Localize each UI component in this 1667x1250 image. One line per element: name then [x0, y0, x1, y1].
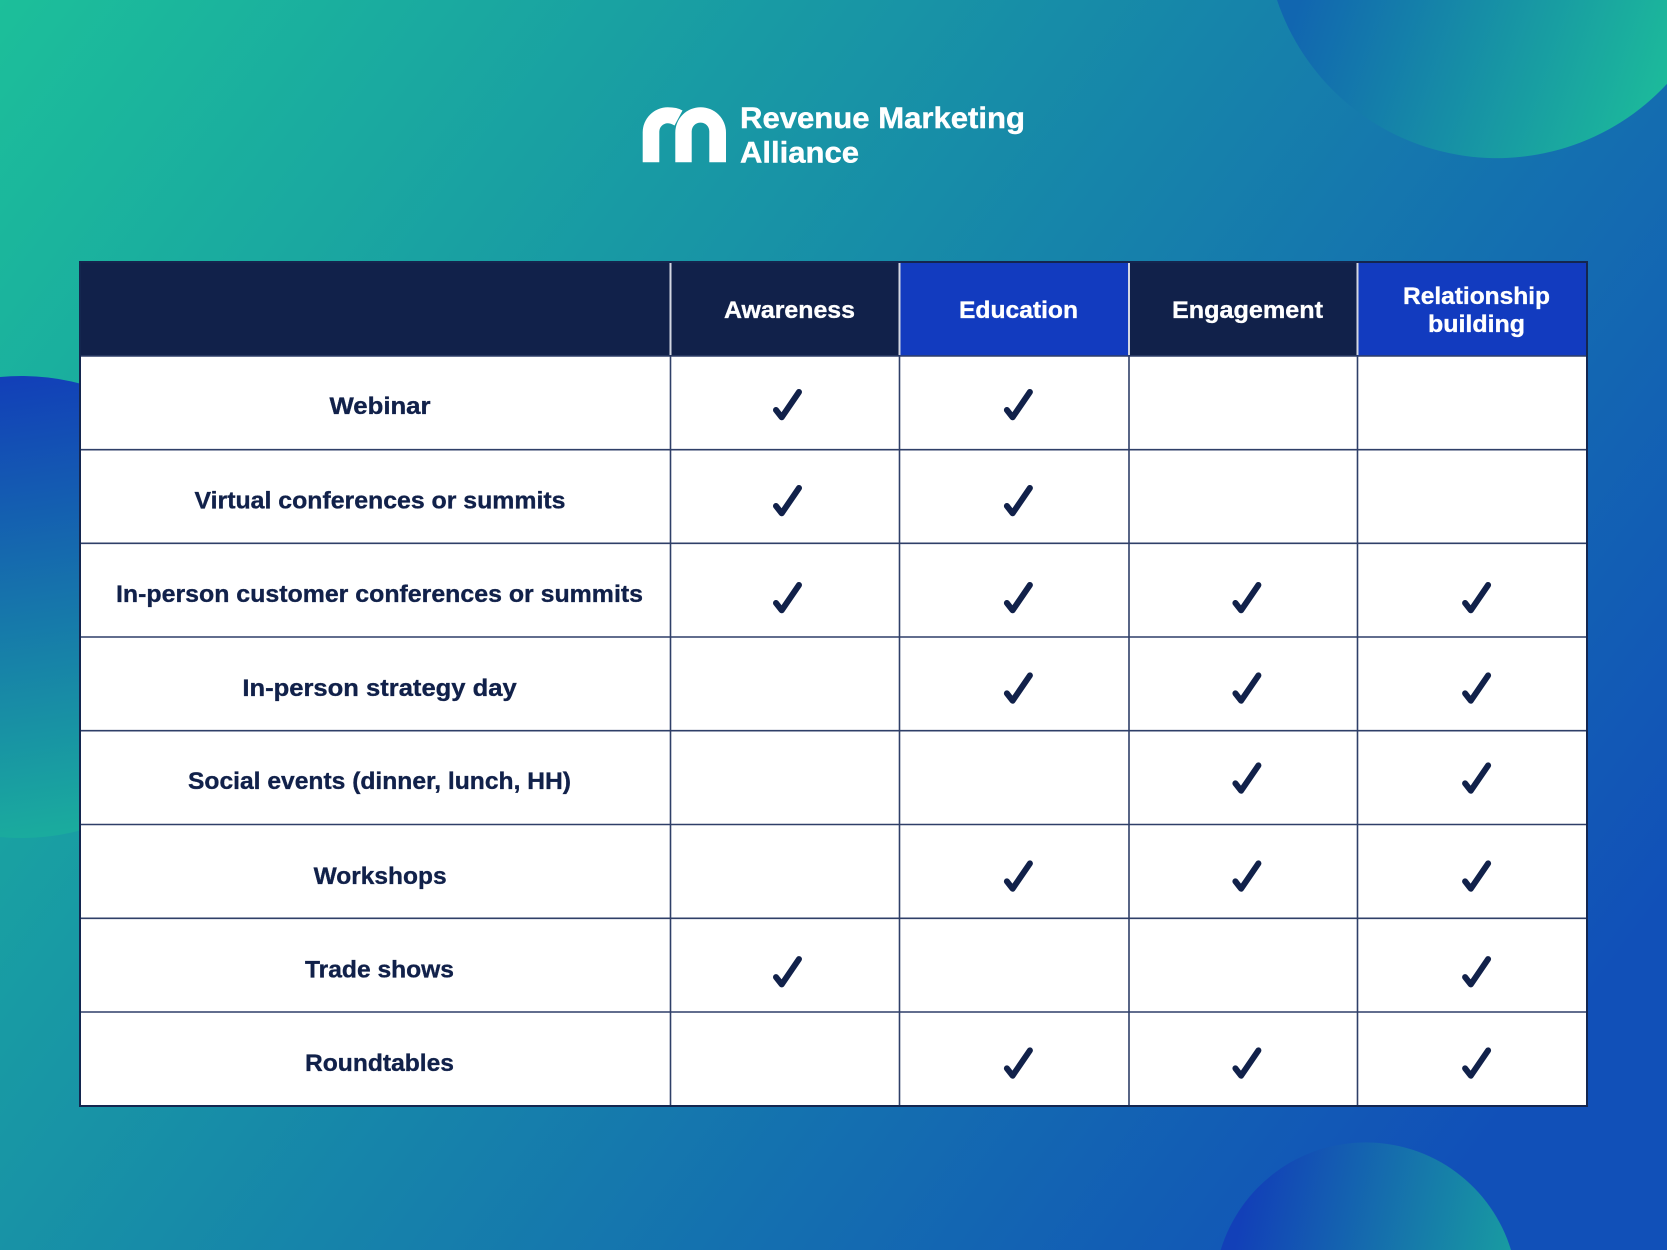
table header row	[80, 262, 1587, 356]
decorative circle: bottom	[1221, 1142, 1511, 1250]
table body	[80, 262, 1587, 1106]
header: Awareness	[670, 262, 900, 356]
row: In-person strategy day: In-person strategy day	[242, 675, 517, 702]
header: Awareness: Awareness	[724, 297, 855, 324]
comparison table	[80, 262, 1587, 1106]
header: Engagement	[1129, 262, 1358, 356]
row: Roundtables	[305, 1050, 1488, 1077]
row: Trade shows: Trade shows	[305, 956, 454, 984]
row: In-person strategy day	[242, 675, 1488, 702]
row: Social events (dinner, lunch, HH)	[188, 765, 1488, 795]
header: Relationship building: Relationship	[1403, 283, 1550, 310]
check marks	[776, 585, 1488, 610]
check marks	[1007, 675, 1488, 701]
logo wordmark	[740, 102, 1025, 170]
row: Roundtables: Roundtables	[305, 1050, 454, 1077]
decorative circle: left	[0, 376, 252, 838]
row: In-person customer conferences or summits: In-person customer conferences or summits	[116, 581, 643, 608]
header: Education: Education	[959, 297, 1078, 324]
check marks	[1235, 765, 1488, 791]
header: Relationship building: building	[1428, 311, 1525, 338]
logo wordmark: Alliance	[740, 136, 859, 170]
logo: Revenue Marketing Alliance	[643, 102, 1025, 170]
check marks	[776, 392, 1030, 417]
check marks	[776, 959, 1488, 984]
row: Social events (dinner, lunch, HH): Social events (dinner, lunch, HH)	[188, 768, 571, 795]
logo wordmark: Revenue Marketing	[740, 102, 1025, 135]
row: In-person customer conferences or summits	[116, 581, 1488, 610]
row: Workshops: Workshops	[314, 863, 447, 890]
row: Workshops	[314, 863, 1488, 890]
header: Engagement: Engagement	[1172, 297, 1323, 324]
check marks	[1007, 863, 1488, 889]
icon: logo mark	[643, 107, 726, 162]
row: Trade shows	[305, 956, 1488, 984]
header: Education	[900, 262, 1129, 356]
header: Relationship building	[1358, 262, 1587, 356]
decorative circle: top right	[1277, 0, 1667, 158]
row: Webinar	[330, 392, 1030, 420]
check marks	[776, 488, 1030, 513]
row: Virtual conferences or summits: Virtual conferences or summits	[194, 488, 566, 515]
row: Webinar: Webinar	[330, 393, 431, 420]
row: Virtual conferences or summits	[194, 488, 1030, 515]
check marks	[1007, 1050, 1488, 1076]
